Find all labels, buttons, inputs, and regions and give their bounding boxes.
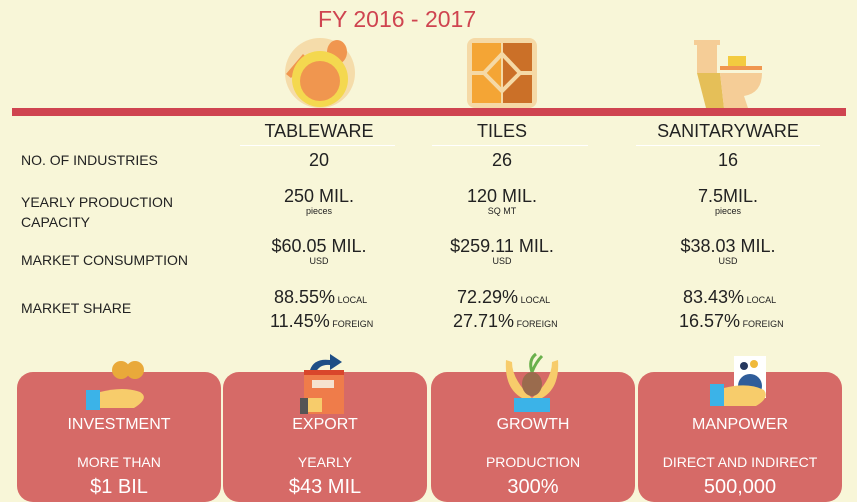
data: tiles: SQ MT (488, 206, 516, 216)
data: tableware: 250 MIL. (284, 186, 354, 206)
icon: tableware (285, 38, 355, 108)
panel: investment: INVESTMENT (67, 416, 171, 433)
data: tiles: 26 (492, 150, 512, 170)
data: tableware: 88.55% LOCAL (274, 287, 367, 307)
row labels: YEARLY PRODUCTION (21, 194, 173, 210)
icon: investment hand coins (86, 361, 144, 410)
data: sanitaryware: $38.03 MIL. (680, 236, 776, 256)
panel: manpower: DIRECT AND INDIRECT (663, 454, 817, 470)
panel: growth (431, 372, 635, 502)
data: sanitaryware: USD (718, 256, 738, 266)
data: tiles: 72.29% LOCAL (457, 287, 550, 307)
icon: growth hands (506, 352, 558, 412)
icon: tiles (467, 38, 537, 108)
data: tableware: pieces (306, 206, 332, 216)
column headers: TILES (477, 121, 527, 141)
panel: export: $43 MIL (289, 476, 361, 498)
data: tableware: USD (309, 256, 328, 266)
title: FY 2016 - 2017 (318, 6, 476, 32)
panel: growth: PRODUCTION (486, 454, 580, 470)
panel: investment (17, 372, 221, 502)
panel: investment: MORE THAN (77, 454, 161, 470)
data: tiles: 120 MIL. (467, 186, 537, 206)
row labels: MARKET CONSUMPTION (21, 252, 188, 268)
row labels: NO. OF INDUSTRIES (21, 152, 158, 168)
icon: export box (300, 354, 344, 414)
data: tiles: USD (492, 256, 512, 266)
data: sanitaryware: 16 (718, 150, 738, 170)
data: tableware: 20 (309, 150, 329, 170)
column headers: TABLEWARE (264, 121, 374, 141)
panel: investment: $1 BIL (90, 476, 148, 498)
panel: export: EXPORT (292, 416, 358, 433)
panel: growth: 300% (507, 476, 559, 498)
icon: toilet (694, 40, 762, 108)
panel: manpower: MANPOWER (692, 416, 788, 433)
data: sanitaryware: pieces (715, 206, 741, 216)
data: sanitaryware: 83.43% LOCAL (683, 287, 776, 307)
panel: export (223, 372, 427, 502)
panel: manpower (638, 372, 842, 502)
panel: export: YEARLY (298, 454, 352, 470)
data: sanitaryware: 16.57% FOREIGN (679, 311, 784, 331)
row labels: CAPACITY (21, 214, 90, 230)
icon: manpower globe hand (710, 356, 766, 406)
data: tiles: $259.11 MIL. (450, 236, 554, 256)
data: sanitaryware: 7.5MIL. (698, 186, 758, 206)
column headers: SANITARYWARE (657, 121, 799, 141)
data: tableware: 11.45% FOREIGN (270, 311, 373, 331)
row labels: MARKET SHARE (21, 300, 131, 316)
data: tiles: 27.71% FOREIGN (453, 311, 558, 331)
red bar (12, 108, 846, 116)
panel: growth: GROWTH (497, 416, 569, 433)
panel: manpower: 500,000 (704, 476, 776, 498)
data: tableware: $60.05 MIL. (271, 236, 367, 256)
